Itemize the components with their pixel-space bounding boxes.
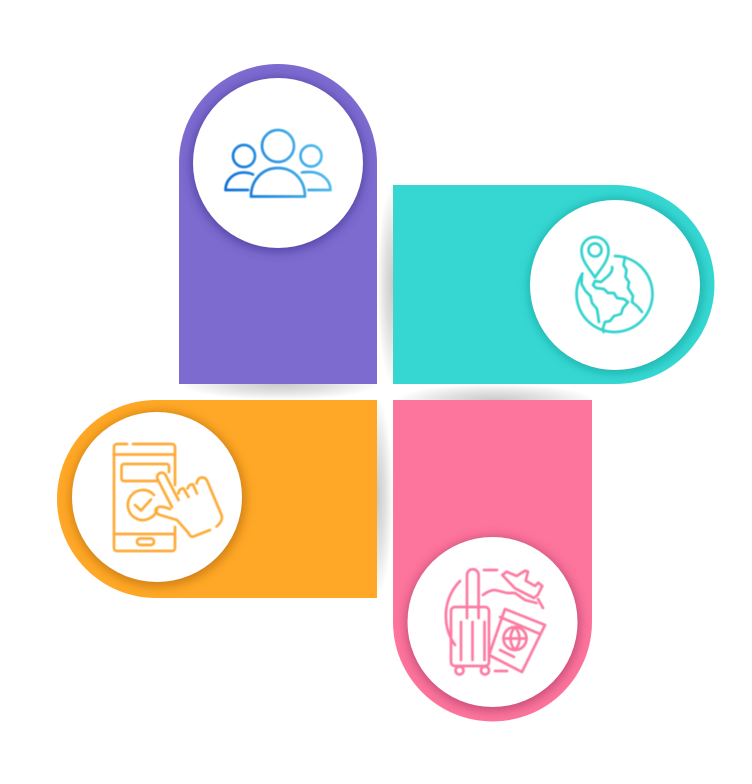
circle shadow (191, 78, 365, 252)
panel: teal globe (393, 185, 714, 384)
white circle (72, 412, 242, 582)
panel: pink travel (393, 400, 592, 721)
circle shadow (529, 199, 703, 373)
white circle (408, 537, 578, 707)
panel: purple people (179, 64, 377, 384)
purple shape (179, 64, 377, 384)
circle shadow (71, 412, 245, 586)
white circle (530, 200, 700, 370)
circle shadow (406, 537, 580, 711)
pink shape (393, 400, 592, 721)
white circle (193, 78, 363, 248)
icon: globe with location pin (576, 237, 652, 332)
orange shape (57, 400, 377, 598)
icon: phone with tapping hand (114, 444, 222, 551)
icon: people group (226, 130, 330, 196)
panel: orange phone (57, 400, 377, 598)
teal shape (393, 185, 714, 384)
bar shadows in the gaps (180, 185, 595, 597)
icon: suitcase, passport and plane (446, 569, 545, 674)
